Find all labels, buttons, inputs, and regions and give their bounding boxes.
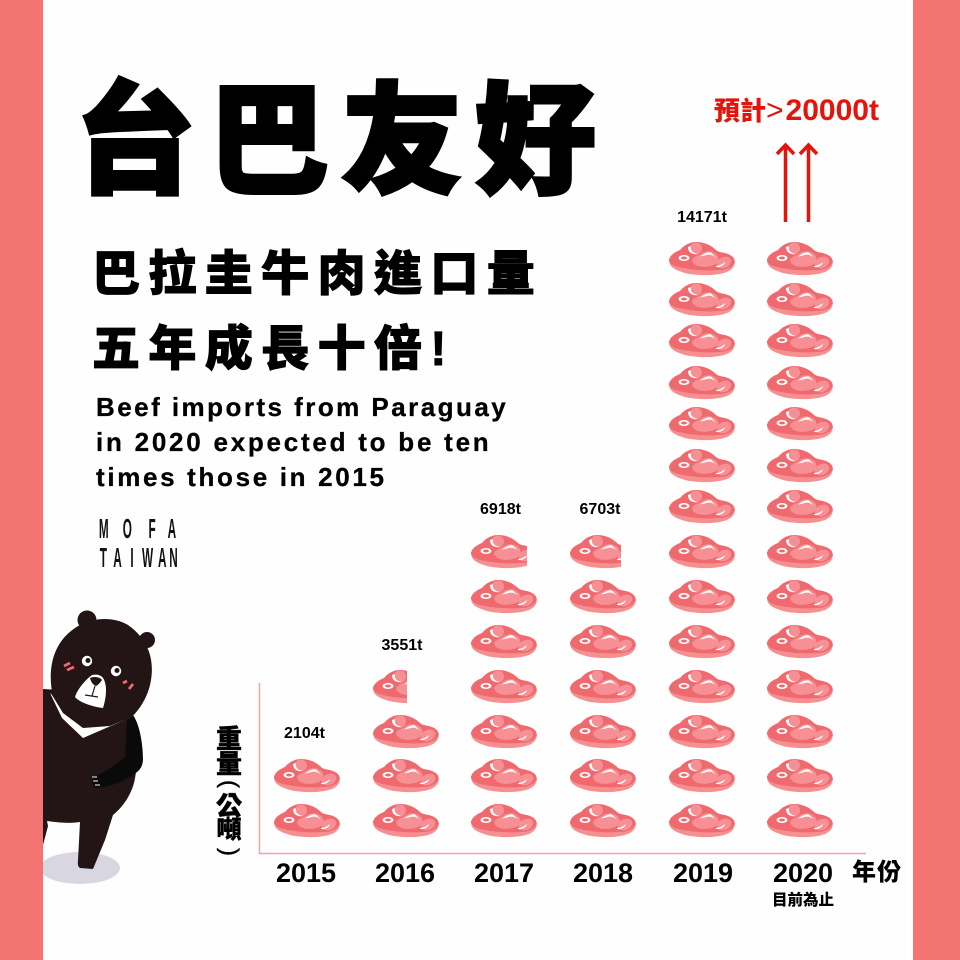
y axis title: ) [216, 848, 243, 856]
bear illustration [43, 610, 155, 869]
right border band [913, 0, 960, 960]
bear left ear [78, 610, 96, 630]
y axis title [216, 724, 243, 856]
bear right ear [139, 632, 155, 648]
x axis title: 年份 [852, 859, 902, 886]
bear mouth [85, 686, 98, 697]
year label 2019: 2019 [673, 858, 733, 888]
English subtitle [96, 392, 508, 492]
year label 2020: 2020 [773, 858, 833, 888]
y axis title: 噸 [216, 816, 242, 844]
value label 2015: 2104t [284, 725, 325, 742]
year label 2015: 2015 [276, 858, 336, 888]
bear arm [92, 715, 143, 788]
bear nose [90, 677, 102, 686]
left border band [0, 0, 43, 960]
English subtitle: times those in 2015 [96, 462, 387, 492]
column 2018 meat icons [570, 535, 636, 837]
y axis title: 量 [216, 749, 242, 779]
bear head [51, 619, 152, 724]
English subtitle: in 2020 expected to be ten [96, 427, 491, 457]
bear body and leg [43, 689, 136, 869]
bear eyes [82, 656, 92, 666]
value label 2017: 6918t [480, 501, 521, 518]
red up arrows [777, 145, 817, 222]
axes [260, 683, 866, 854]
column 2019 meat icons [669, 242, 735, 837]
year label 2016: 2016 [375, 858, 435, 888]
MOFA Taiwan logo: A [168, 513, 176, 545]
value label 2019: 14171t [677, 209, 727, 226]
value label 2018: 6703t [580, 501, 620, 518]
subtitle line 1: 巴拉圭牛肉進口量 [92, 248, 543, 301]
MOFA Taiwan logo: M [99, 513, 109, 545]
y axis title: 重 [216, 724, 242, 754]
y axis title: 公 [216, 791, 242, 821]
bear chest mark [50, 693, 127, 738]
bear shadow [40, 852, 120, 884]
year label 2017: 2017 [474, 858, 534, 888]
MOFA Taiwan logo [99, 513, 178, 572]
year label 2018: 2018 [573, 858, 633, 888]
bear cheeks [64, 663, 133, 689]
note: up to now: 目前為止 [772, 892, 834, 909]
forecast label: 預計>20000t [714, 94, 879, 127]
value label 2016: 3551t [382, 637, 422, 654]
title: 台巴友好 [75, 75, 609, 209]
column 2016 meat icons [373, 670, 439, 837]
subtitle line 2: 五年成長十倍! [92, 323, 455, 376]
MOFA Taiwan logo: O [123, 513, 132, 545]
y axis title: ( [216, 780, 243, 788]
bear muzzle [75, 675, 106, 708]
column 2017 meat icons [471, 535, 537, 837]
column 2015 meat icons [274, 759, 340, 837]
bear paw claws [92, 777, 100, 785]
MOFA Taiwan logo: F [149, 513, 156, 545]
column 2020 meat icons [767, 242, 833, 837]
English subtitle: Beef imports from Paraguay [96, 392, 508, 422]
